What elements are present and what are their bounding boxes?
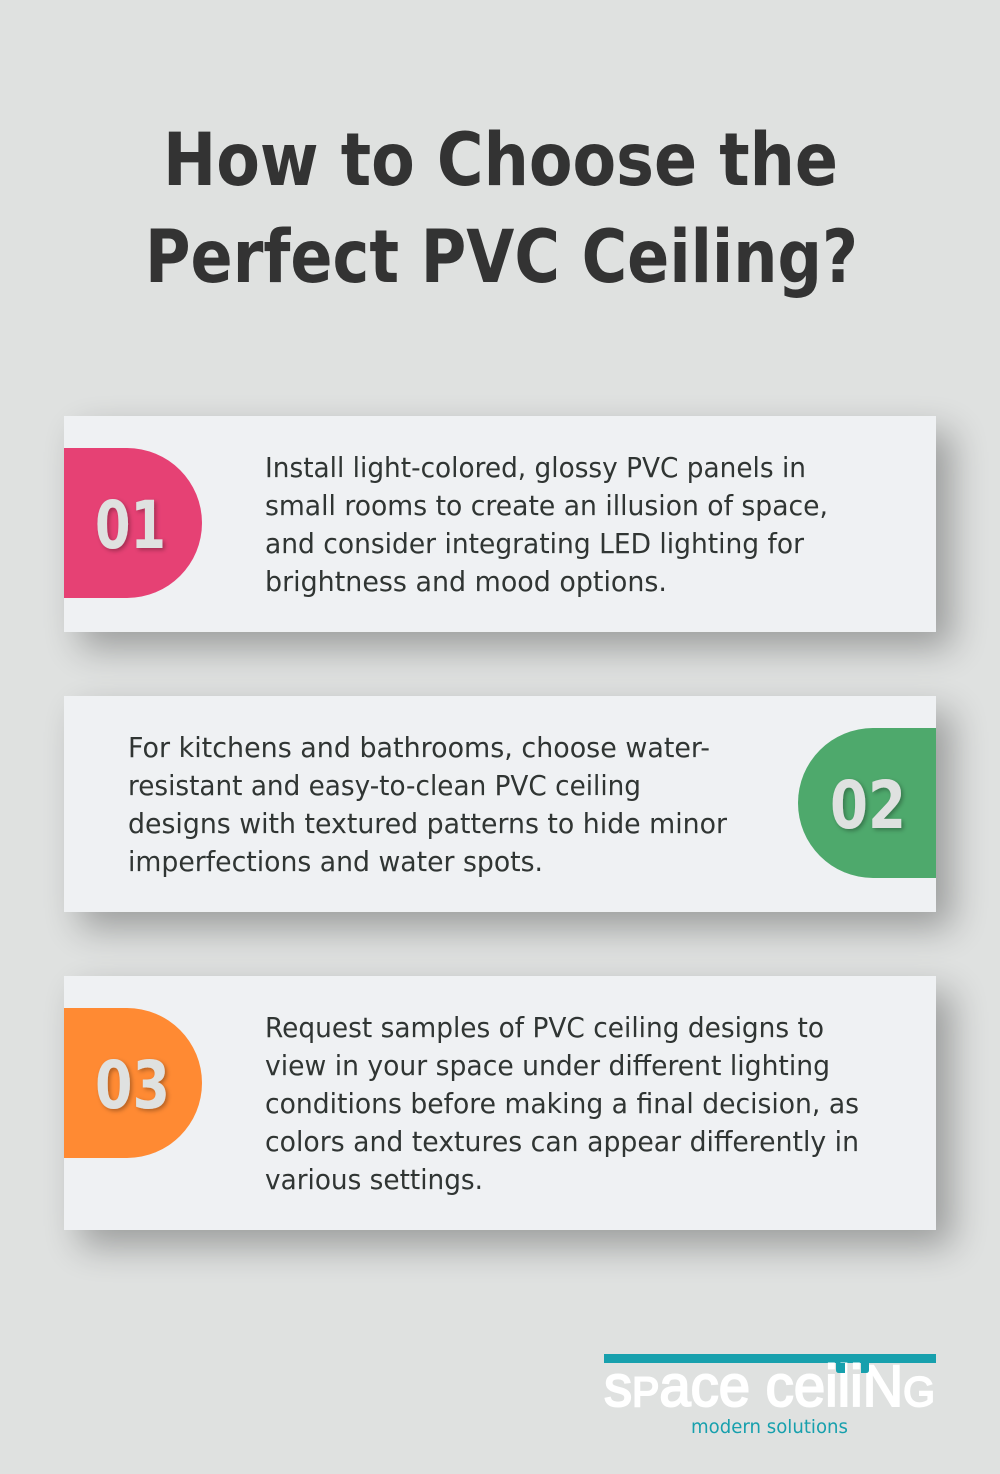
- step 1 text: and consider integrating LED lighting for: [265, 528, 805, 560]
- title: How to Choose the: [163, 118, 838, 203]
- step 1 text: small rooms to create an illusion of space,: [265, 490, 828, 522]
- logo: Space Ceiling: sPace ceiliNG: [604, 1354, 935, 1419]
- step 3 text: colors and textures can appear differently in: [265, 1126, 859, 1158]
- title: Perfect PVC Ceiling?: [145, 215, 858, 300]
- step 3 number badge: 03: [95, 1047, 170, 1124]
- logo: Space Ceiling: modern solutions: [691, 1416, 848, 1438]
- step 1 text: [265, 452, 828, 598]
- step 3 text: view in your space under different lighting: [265, 1050, 830, 1082]
- step 2 text: designs with textured patterns to hide minor: [128, 808, 728, 840]
- step 1 text: brightness and mood options.: [265, 566, 667, 598]
- step 3 text: Request samples of PVC ceiling designs to: [265, 1012, 824, 1044]
- step 3 text: conditions before making a final decision, as: [265, 1088, 859, 1120]
- step 2 text: imperfections and water spots.: [128, 846, 543, 878]
- step 1 number badge: 01: [95, 487, 166, 564]
- step 2 text: [128, 732, 728, 878]
- step 3 number badge: [64, 1008, 202, 1158]
- step 1 number badge: [64, 448, 202, 598]
- step 2 number badge: 02: [830, 767, 906, 844]
- step 2 text: For kitchens and bathrooms, choose water-: [128, 732, 710, 764]
- step 3 text: [265, 1012, 859, 1196]
- panel: step 3: [64, 976, 952, 1246]
- step 3 text: various settings.: [265, 1164, 483, 1196]
- panel: step 2: [64, 696, 952, 928]
- title: [145, 118, 858, 300]
- step 1 text: Install light-colored, glossy PVC panels in: [265, 452, 806, 484]
- panel: step 1: [64, 416, 952, 648]
- step 2 number badge: [798, 728, 936, 878]
- step 2 text: resistant and easy-to-clean PVC ceiling: [128, 770, 641, 802]
